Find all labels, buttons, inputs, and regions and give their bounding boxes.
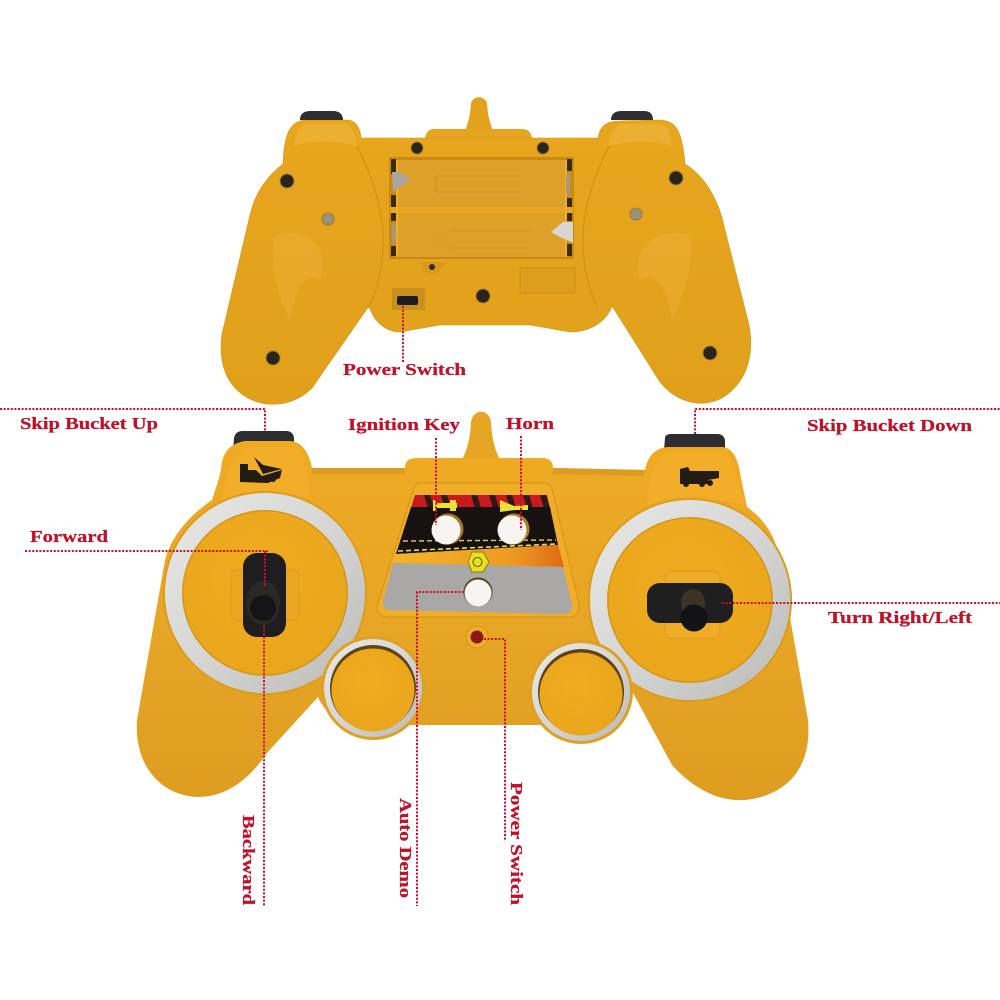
callout lines — [0, 306, 1000, 906]
LED — [466, 626, 488, 648]
horn button — [498, 514, 530, 544]
truck icon: skip lowered — [680, 467, 719, 487]
controller: front view — [137, 412, 808, 800]
controller: rear view — [221, 97, 751, 404]
key symbol — [433, 500, 457, 511]
black road band — [396, 507, 558, 554]
screws — [266, 142, 717, 365]
label: turn right/left: Turn Right/Left — [828, 608, 972, 627]
left stick ring — [163, 491, 367, 695]
label: skip bucket up: Skip Bucket Up — [20, 414, 158, 433]
hex symbol — [468, 552, 489, 572]
left small button — [321, 636, 425, 740]
battery contact, lower left — [392, 222, 396, 246]
battery contact, lower right — [551, 222, 573, 243]
red hazard band — [411, 495, 550, 508]
label: horn: Horn — [506, 414, 555, 433]
shoulder button, front right — [664, 434, 725, 452]
road dashes, lower — [398, 544, 557, 551]
orange band — [393, 545, 564, 567]
grip highlight, left lower — [273, 233, 323, 320]
slide switch — [397, 296, 418, 305]
label: auto demo: Auto Demo — [396, 798, 415, 898]
truck icon: skip raised — [240, 457, 282, 483]
battery compartment — [389, 157, 574, 259]
battery contact, upper left — [392, 172, 411, 192]
top face edge — [312, 468, 645, 476]
label: power switch, front: Power Switch — [507, 782, 526, 906]
shoulder button, rear left — [300, 111, 343, 120]
grip highlight, right lower — [638, 233, 691, 320]
grey plate — [383, 563, 572, 614]
hazard stripes — [424, 495, 550, 508]
grip curve, left — [357, 146, 383, 308]
shell, rear — [221, 120, 751, 404]
horn symbol — [500, 500, 528, 512]
label: skip bucket down: Skip Bucket Down — [807, 416, 973, 435]
right stick: horizontal slot — [647, 571, 733, 638]
shoulder highlight, right — [608, 124, 672, 146]
antenna, front — [461, 412, 501, 462]
right small button — [529, 640, 633, 744]
label: backward: Backward — [239, 815, 258, 906]
antenna, rear — [463, 97, 495, 135]
ignition key button — [432, 514, 464, 544]
label: forward: Forward — [30, 527, 109, 546]
centre ridge, rear — [425, 129, 532, 138]
shoulder button, front left — [233, 431, 294, 450]
shoulder highlight, left — [294, 124, 357, 146]
labels — [20, 360, 973, 906]
shoulder highlight, left — [222, 447, 310, 500]
grip curve, right — [583, 146, 609, 308]
right stick ring — [588, 498, 792, 702]
shell, front — [137, 441, 808, 800]
centre panel: sticker — [377, 483, 579, 617]
label: ignition key: Ignition Key — [348, 415, 461, 434]
road dashes, upper — [403, 540, 556, 541]
auto demo button — [464, 578, 492, 606]
shoulder button, rear right — [611, 111, 653, 120]
battery contact, upper right — [566, 172, 570, 198]
back panel details — [392, 262, 575, 310]
left stick: vertical slot — [231, 553, 299, 637]
shoulder highlight, right — [647, 452, 745, 505]
battery markings — [436, 176, 530, 248]
label: power switch, rear: Power Switch — [343, 360, 467, 379]
